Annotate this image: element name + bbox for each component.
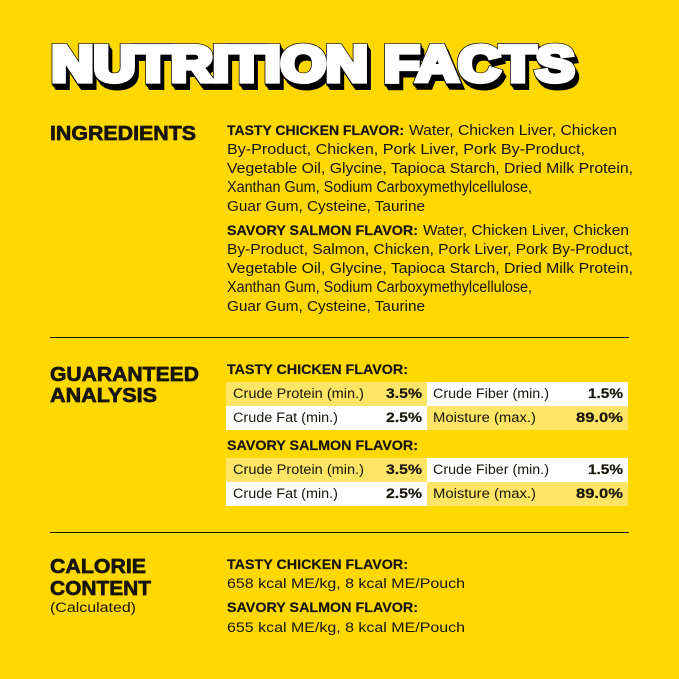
heading: calorie content: CONTENT: [50, 577, 151, 600]
heading: calorie content: (Calculated): [50, 600, 136, 615]
heading: calorie content: CALORIE: [50, 555, 146, 578]
text block: ingredients list: Guar Gum, Cysteine, Taurine: [227, 199, 425, 215]
text block: calorie values: 655 kcal ME/kg, 8 kcal ME/Pouch: [227, 620, 465, 635]
table: savory salmon analysis: [226, 458, 628, 506]
heading: calorie content: [50, 555, 151, 615]
title: NUTRITION FACTS: NUTRITION FACTS: [52, 36, 574, 92]
text block: ingredients list: Xanthan Gum, Sodium Carboxymethylcellulose,: [227, 179, 532, 196]
table: tasty chicken analysis: Crude Protein (min.): [233, 386, 364, 401]
table: savory salmon analysis: 2.5%: [386, 486, 422, 501]
table: tasty chicken analysis: 2.5%: [386, 410, 422, 425]
subheading: tasty chicken analysis: TASTY CHICKEN FLAVOR:: [227, 361, 408, 377]
table: tasty chicken analysis: 1.5%: [588, 386, 623, 401]
text block: ingredients list: Water, Chicken Liver, Chicken: [409, 123, 617, 139]
table: tasty chicken analysis: [226, 382, 628, 430]
text block: ingredients list: Water, Chicken Liver, Chicken: [423, 223, 629, 239]
heading: guaranteed analysis: ANALYSIS: [50, 384, 157, 407]
text block: ingredients list: [227, 122, 633, 315]
text block: ingredients list: Xanthan Gum, Sodium Carboxymethylcellulose,: [227, 279, 532, 296]
text block: ingredients list: SAVORY SALMON FLAVOR:: [227, 222, 418, 238]
table: tasty chicken analysis: Crude Fat (min.): [233, 410, 338, 425]
text block: ingredients list: By-Product, Salmon, Chicken, Pork Liver, Pork By-Product,: [227, 242, 633, 258]
title: NUTRITION FACTS: NUTRITION FACTS: [55, 42, 578, 98]
text block: ingredients list: Vegetable Oil, Glycine, Tapioca Starch, Dried Milk Protein,: [227, 161, 633, 177]
text block: ingredients list: Vegetable Oil, Glycine, Tapioca Starch, Dried Milk Protein,: [227, 261, 633, 277]
text block: ingredients list: TASTY CHICKEN FLAVOR:: [227, 122, 404, 138]
text block: ingredients list: Guar Gum, Cysteine, Taurine: [227, 299, 425, 315]
table: tasty chicken analysis: Crude Fiber (min.): [433, 386, 549, 401]
table: savory salmon analysis: Crude Fiber (min.): [433, 462, 549, 477]
subheading: savory salmon analysis: SAVORY SALMON FLAVOR:: [227, 437, 418, 453]
title: NUTRITION FACTS: NUTRITION FACTS: [52, 38, 575, 94]
heading: guaranteed analysis: GUARANTEED: [50, 363, 199, 386]
table: tasty chicken analysis: 89.0%: [576, 410, 623, 425]
table: savory salmon analysis: Moisture (max.): [433, 486, 536, 501]
text block: calorie values: SAVORY SALMON FLAVOR:: [227, 599, 418, 615]
title: NUTRITION FACTS: NUTRITION FACTS: [52, 36, 574, 92]
text block: ingredients list: By-Product, Chicken, Pork Liver, Pork By-Product,: [227, 142, 585, 158]
table: tasty chicken analysis: Moisture (max.): [433, 410, 536, 425]
title: NUTRITION FACTS: NUTRITION FACTS: [53, 39, 576, 95]
title: NUTRITION FACTS: NUTRITION FACTS: [54, 40, 577, 96]
text block: calorie values: TASTY CHICKEN FLAVOR:: [227, 556, 408, 572]
text block: calorie values: 658 kcal ME/kg, 8 kcal ME/Pouch: [227, 576, 465, 591]
table: tasty chicken analysis: 3.5%: [386, 386, 422, 401]
table: savory salmon analysis: 1.5%: [588, 462, 623, 477]
table: savory salmon analysis: 89.0%: [576, 486, 623, 501]
table: savory salmon analysis: Crude Fat (min.): [233, 486, 338, 501]
heading: ingredients: INGREDIENTS: [50, 122, 196, 145]
table: savory salmon analysis: Crude Protein (min.): [233, 462, 364, 477]
text block: calorie values: [227, 556, 465, 635]
table: savory salmon analysis: 3.5%: [386, 462, 422, 477]
heading: guaranteed analysis: [50, 363, 199, 407]
